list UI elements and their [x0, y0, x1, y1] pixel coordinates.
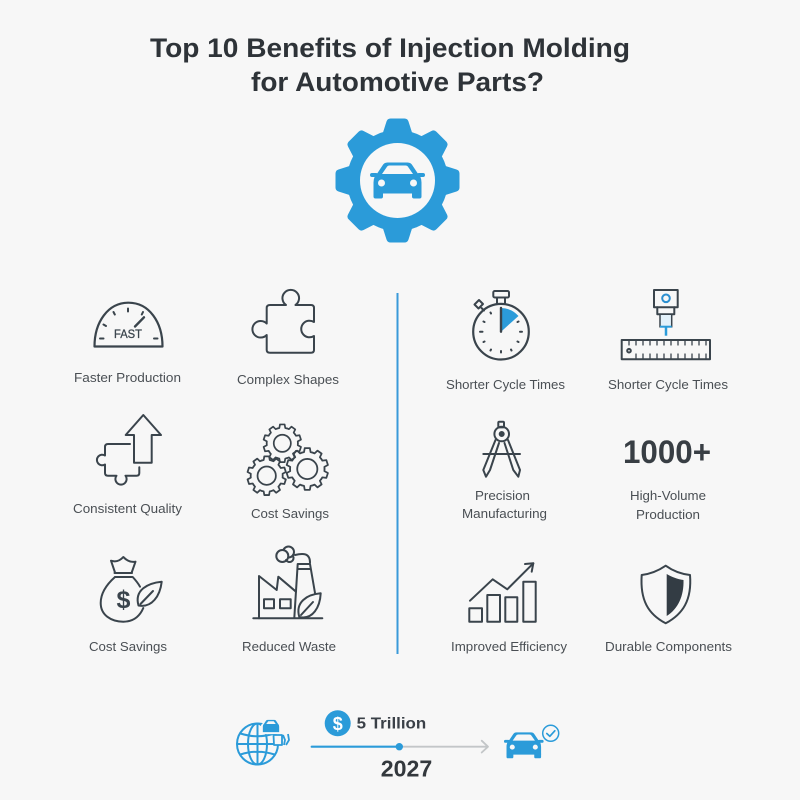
benefit: Durable Components: [605, 566, 732, 654]
icon: dollar coin: $: [333, 714, 343, 734]
benefit: Reduced Waste: [242, 546, 336, 654]
icon: factory with leaf: [253, 546, 322, 618]
icon: gear with car: [336, 118, 460, 242]
icon: money bag with leaf: $: [117, 586, 131, 614]
label: Cost Savings: [89, 640, 167, 654]
year: 2027: 2027: [381, 756, 432, 782]
label: [630, 489, 706, 522]
icon: stopwatch: [473, 291, 529, 360]
icon: three gears: [247, 424, 329, 495]
icon: shield: [641, 566, 690, 623]
icon: puzzle with up arrow: [97, 415, 161, 485]
benefit: Precision Manufacturing: [462, 422, 547, 521]
icon: nozzle over ruler: [622, 290, 710, 359]
icon: speedometer: FAST: [114, 327, 143, 341]
timeline arrow: [312, 741, 488, 752]
benefit: Shorter Cycle Times (stopwatch): [446, 291, 565, 392]
label: Shorter Cycle Times: [446, 378, 565, 392]
benefit: Improved Efficiency: [451, 563, 568, 654]
benefit: Cost Savings (money bag): [89, 557, 167, 654]
label: Cost Savings: [251, 507, 329, 521]
title: [150, 33, 630, 97]
benefit: Complex Shapes: [237, 290, 339, 387]
icon: globe with car: [237, 719, 289, 764]
timeline footer: [237, 710, 559, 782]
benefit: Cost Savings (gears): [247, 424, 329, 521]
benefit: Consistent Quality: [73, 415, 183, 516]
icon: dollar coin: [325, 710, 351, 736]
label: Consistent Quality: [73, 502, 183, 516]
big number: 1000+: [623, 434, 711, 470]
label: Reduced Waste: [242, 640, 336, 654]
label: Durable Components: [605, 640, 732, 654]
label: Faster Production: [74, 371, 181, 385]
icon: car with check: [504, 725, 559, 758]
benefit: Shorter Cycle Times (nozzle and ruler): [608, 290, 728, 392]
icon: drafting compass: [483, 422, 520, 477]
icon: puzzle piece: [252, 290, 314, 353]
central divider: [396, 293, 398, 654]
label: Improved Efficiency: [451, 640, 568, 654]
label: High-Volume: [630, 489, 706, 503]
icon: rising bar chart: [469, 563, 536, 622]
label: [462, 489, 547, 521]
label: Precision: [475, 489, 530, 503]
value: 5 Trillion: 5 Trillion: [357, 716, 426, 732]
benefit: High-Volume Production: [623, 434, 711, 522]
label: Complex Shapes: [237, 373, 339, 387]
label: Production: [636, 508, 700, 522]
title: Top 10 Benefits of Injection Molding: [150, 33, 630, 63]
label: Manufacturing: [462, 507, 547, 521]
benefit: Faster Production: [74, 303, 181, 385]
title: for Automotive Parts?: [251, 67, 544, 97]
label: Shorter Cycle Times: [608, 378, 728, 392]
